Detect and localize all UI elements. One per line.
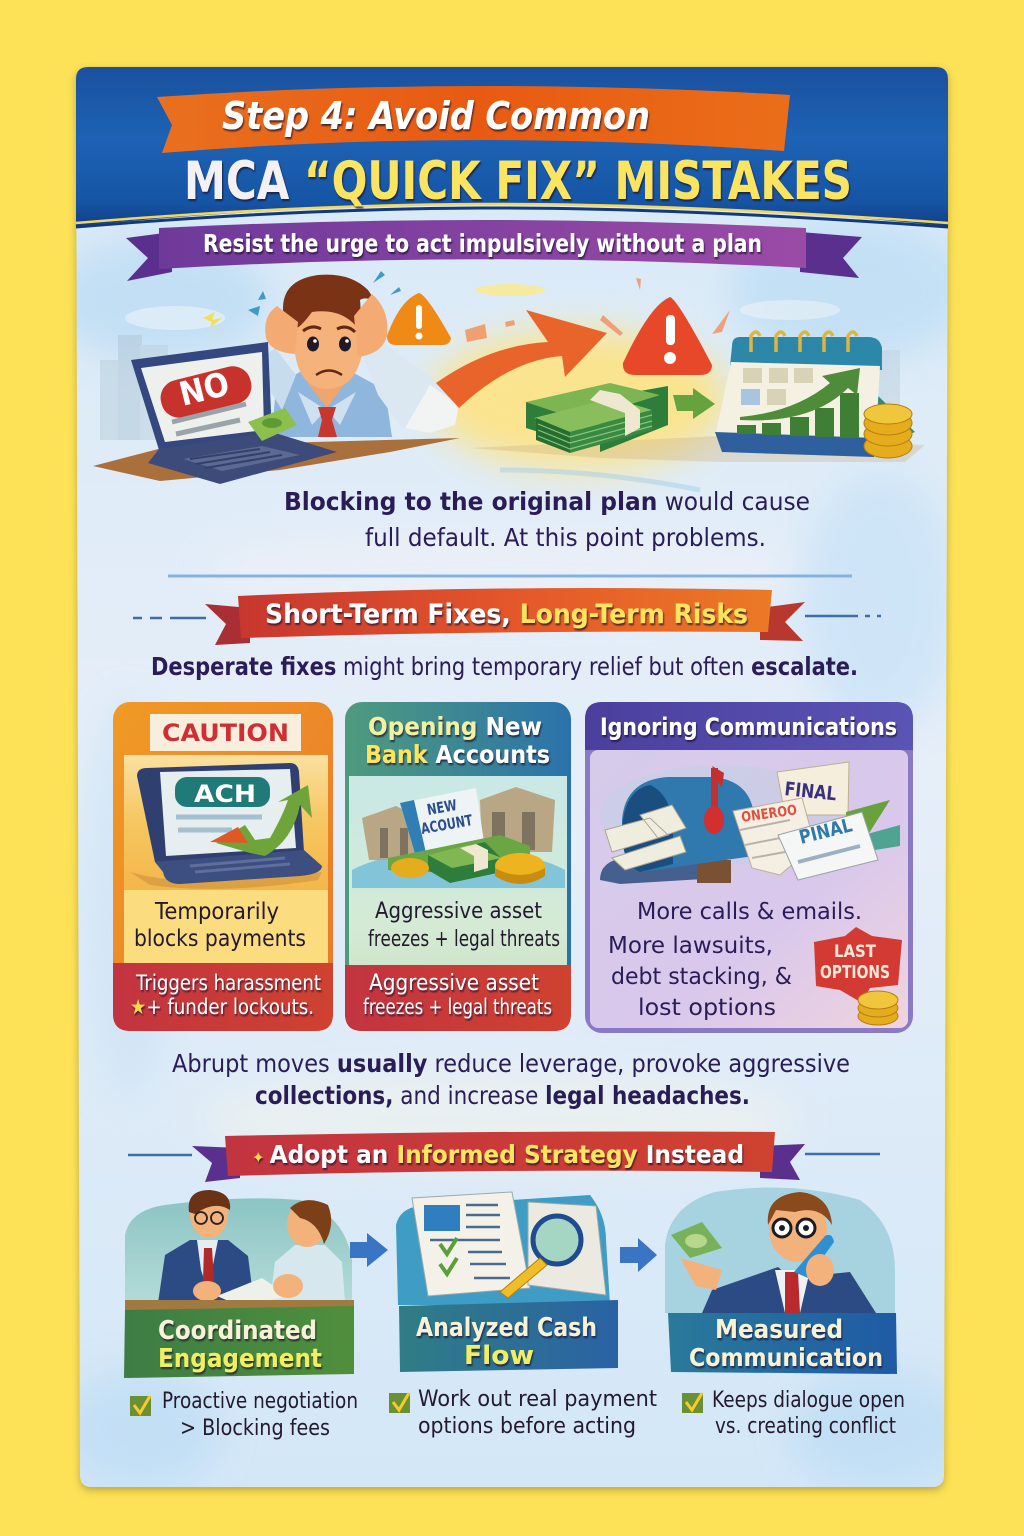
arrow: small green — [673, 388, 715, 419]
icon: laptop ACH — [130, 763, 322, 889]
icon: warning triangle red — [600, 278, 730, 375]
text: temporarily blocks payments — [134, 899, 306, 952]
icon: stack of cash — [526, 383, 668, 453]
arrow: step one to two — [350, 1233, 388, 1267]
icon: lost options: OPTIONS — [820, 962, 890, 983]
label: analyzed cash flow: Analyzed Cash — [416, 1313, 597, 1343]
icon: lost options: LAST — [834, 942, 876, 962]
text: temporarily blocks payments: Temporarily — [154, 899, 279, 925]
text: aggressive asset freezes, red: freezes + legal threats — [363, 995, 552, 1019]
icon: mailbox with letters: PINAL — [797, 814, 855, 849]
label: measured communication — [668, 1313, 897, 1374]
label: coordinated engagement: Engagement — [158, 1344, 322, 1374]
benefit: proactive negotiation: Proactive negotiation — [162, 1389, 358, 1414]
label: measured communication: Measured — [715, 1315, 843, 1345]
text: consequences: lost options — [638, 995, 776, 1021]
text: temporarily blocks payments: blocks payments — [134, 926, 306, 952]
icon: mailbox with letters: ONEROO — [740, 802, 798, 826]
icon: stressed man — [203, 271, 459, 437]
arrow: step two to three — [620, 1238, 657, 1272]
icon: lost options — [814, 927, 902, 1025]
section banner: informed strategy — [128, 1132, 880, 1182]
icon: bank and new account with cash: NEW — [426, 796, 459, 819]
heading: opening new bank accounts: Bank Accounts — [365, 740, 550, 769]
title: MCA “QUICK FIX” MISTAKES — [184, 151, 852, 212]
hero illustration — [93, 271, 925, 490]
panel: ignoring communications — [585, 702, 913, 1033]
text: consequences — [608, 899, 862, 1021]
icon: mailbox with letters: FINAL — [783, 778, 837, 805]
benefit: keeps dialogue open: Keeps dialogue open — [712, 1388, 905, 1413]
panel: measured communication — [665, 1188, 897, 1374]
icon: bank and new account with cash: ACOUNT — [420, 811, 474, 838]
benefit: proactive negotiation — [130, 1389, 358, 1441]
text: aggressive asset freezes: freezes + legal threats — [368, 926, 560, 952]
icon: mailbox with letters — [600, 762, 900, 884]
heading: ignoring communications: Ignoring Communications — [600, 713, 897, 741]
text: consequences: More lawsuits, — [608, 933, 773, 959]
subtitle ribbon: Resist the urge to act impulsively without a plan — [203, 229, 762, 258]
benefit: work out payment options: Work out real payment — [418, 1387, 657, 1412]
text: aggressive asset freezes: Aggressive asset — [375, 898, 542, 924]
text: triggers harassment — [130, 971, 321, 1019]
title banner: Step 4: Step 4: Avoid Common — [222, 94, 650, 138]
icon: calendar with chart — [715, 332, 915, 458]
text: triggers harassment: ★+ funder lockouts. — [130, 995, 314, 1019]
benefit: keeps dialogue open: vs. creating conflict — [715, 1414, 896, 1439]
text: consequences: debt stacking, & — [611, 964, 792, 990]
intro text: full default. At this point problems. — [365, 523, 766, 552]
middle text: Abrupt moves usually reduce leverage, provoke aggressive — [172, 1049, 850, 1078]
heading: opening new bank accounts: Opening New — [368, 712, 542, 741]
intro text — [284, 487, 810, 552]
benefit: proactive negotiation: > Blocking fees — [180, 1416, 330, 1441]
label: analyzed cash flow — [399, 1300, 618, 1372]
section intro text: Desperate fixes might bring temporary relief but often escalate. — [151, 652, 858, 681]
title banner: Step 4 — [157, 86, 790, 153]
label: caution — [150, 714, 301, 751]
middle text: collections, and increase legal headaches. — [255, 1081, 750, 1110]
scene backdrop — [93, 284, 925, 490]
intro text: Blocking to the original plan would cause — [284, 487, 810, 516]
illustration: man on phone — [665, 1188, 895, 1313]
section banner: informed strategy: ✦ Adopt an Informed Strategy Instead — [252, 1140, 744, 1169]
benefit: keeps dialogue open — [682, 1388, 905, 1439]
panel: opening new bank accounts — [345, 702, 571, 1031]
illustration: two men at desk — [125, 1190, 354, 1312]
label: caution: CAUTION — [162, 719, 289, 747]
arrow: escalating orange — [436, 310, 607, 408]
text: consequences: More calls & emails. — [637, 899, 862, 925]
section banner: short-term fixes — [133, 576, 881, 645]
icon: bank and new account with cash — [362, 787, 555, 884]
label: coordinated engagement — [124, 1306, 354, 1378]
section banner: short-term fixes: Short-Term Fixes, Long-Term Risks — [265, 599, 748, 630]
panel: analyzed cash flow — [396, 1192, 618, 1372]
icon: laptop ACH: ACH — [194, 780, 256, 808]
text: aggressive asset freezes — [368, 898, 560, 952]
icon: warning triangle orange — [387, 293, 451, 345]
header band — [76, 67, 948, 227]
illustration: report and magnifier — [396, 1192, 610, 1305]
panel: blocks payments — [113, 702, 333, 1031]
text: aggressive asset freezes, red: Aggressive asset — [369, 971, 539, 996]
middle text — [172, 1049, 850, 1110]
panel: coordinated engagement — [124, 1190, 354, 1378]
benefit: work out payment options — [389, 1387, 657, 1439]
label: analyzed cash flow: Flow — [464, 1341, 534, 1371]
label: measured communication: Communication — [689, 1343, 883, 1372]
text: triggers harassment: Triggers harassment — [135, 971, 321, 995]
heading: opening new bank accounts — [365, 712, 550, 769]
subtitle ribbon — [126, 220, 862, 281]
label: coordinated engagement: Coordinated — [158, 1316, 317, 1346]
text: aggressive asset freezes, red — [363, 971, 552, 1019]
icon: laptop with NO — [131, 342, 337, 484]
icon: laptop with NO: NO — [175, 364, 233, 414]
benefit: work out payment options: options before acting — [418, 1414, 636, 1439]
